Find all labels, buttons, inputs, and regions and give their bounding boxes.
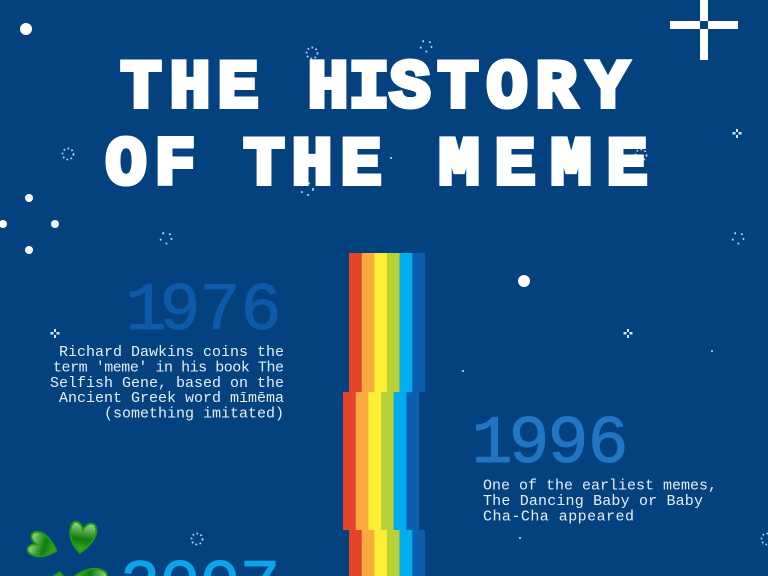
title: OFTHEMEME <box>106 128 647 204</box>
text block: 1996 description <box>483 478 717 526</box>
text block: 1996 description: The Dancing Baby or Baby <box>483 493 703 510</box>
text block: 1976 description: Ancient Greek word mīmēma <box>59 390 284 407</box>
year heading: 1976: 1976 <box>126 273 281 350</box>
text block: 1976 description: Richard Dawkins coins the <box>59 344 284 361</box>
text block: 1976 description <box>50 344 284 422</box>
text block: 1996 description: Cha-Cha appeared <box>483 508 634 526</box>
text block: 1976 description: (something imitated) <box>104 406 284 422</box>
title <box>106 50 647 204</box>
text block: 1976 description: term 'meme' in his book The <box>53 360 284 376</box>
icon: small sparkle crosses <box>50 129 742 338</box>
title: THEHISTORY <box>121 50 629 128</box>
text block: 1976 description: Selfish Gene, based on the <box>50 375 284 392</box>
year heading: 1996: 1996 <box>472 406 628 483</box>
text block: 1996 description: One of the earliest memes, <box>483 478 717 494</box>
icon: large sparkle cross <box>670 0 738 60</box>
rainbow timeline <box>343 253 425 576</box>
icon: green four-leaf clover <box>26 521 108 576</box>
